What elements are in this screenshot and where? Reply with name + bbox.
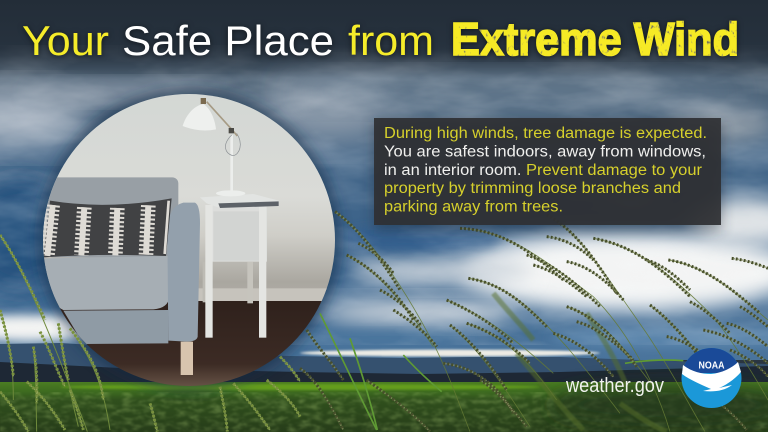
background: green field xyxy=(0,382,768,432)
grass: left side blades and seed heads xyxy=(0,235,300,432)
icon: NOAA logo: NOAA xyxy=(698,360,724,372)
left seed heads light xyxy=(0,235,300,432)
books xyxy=(200,194,278,205)
grass: right side blades and seed heads xyxy=(300,212,768,432)
advice line 5: parking away from trees. xyxy=(384,198,563,216)
advice line 2: You are safest indoors, away from windows, xyxy=(384,144,706,160)
seed heads dark xyxy=(300,212,768,432)
advice line 1: During high winds, tree damage is expected. xyxy=(384,125,707,142)
side table xyxy=(203,205,267,338)
desk lamp xyxy=(183,98,245,196)
advice line 3: in an interior room. Prevent damage to your xyxy=(384,162,702,179)
title words: Extreme Wind: Extreme Wind xyxy=(451,13,739,65)
panel: safety advice text xyxy=(374,118,721,225)
title words: Safe Place: Safe Place xyxy=(122,17,334,64)
seed heads light xyxy=(300,212,768,432)
website label: weather.gov xyxy=(565,375,664,397)
shadow behind photo circle xyxy=(39,90,339,390)
title word: Your: Your xyxy=(22,17,109,64)
sofa xyxy=(44,177,200,375)
title word: from: from xyxy=(348,17,434,64)
panel: circular living room photo xyxy=(40,90,340,391)
title: Your Safe Place from Extreme Wind xyxy=(22,13,739,65)
background: horizon and mountains xyxy=(0,343,768,390)
left seed heads green xyxy=(0,235,300,432)
striped pillow xyxy=(43,198,172,257)
baseboard xyxy=(198,288,327,301)
icon: NOAA logo xyxy=(680,346,744,408)
room wall xyxy=(40,90,340,303)
shadow behind text panel xyxy=(374,122,721,230)
wood floor xyxy=(56,301,322,386)
advice line 4: property by trimming loose branches and xyxy=(384,180,681,197)
